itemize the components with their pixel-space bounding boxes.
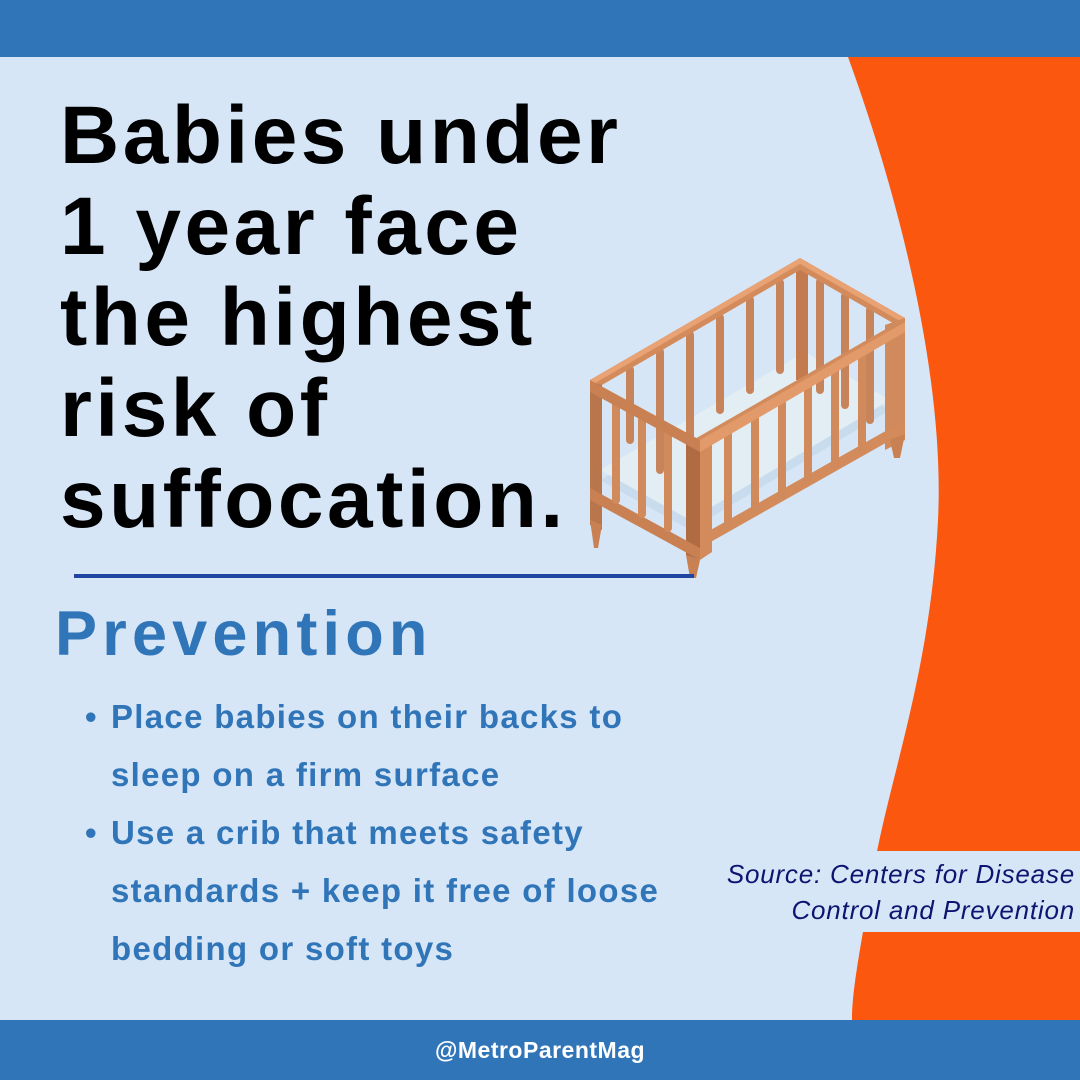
footer bar with handle [0, 1020, 1080, 1080]
title: risk of [60, 363, 331, 454]
bullet list: bedding or soft toys [111, 930, 454, 967]
bullet list: Place babies on their backs to [111, 698, 623, 735]
footer bar with handle: @MetroParentMag [435, 1037, 645, 1063]
bullet list [85, 698, 659, 967]
bullet list: sleep on a firm surface [111, 756, 500, 793]
bullet list: standards + keep it free of loose [111, 872, 659, 909]
title: the highest [60, 272, 536, 363]
heading: Prevention: Prevention [55, 599, 433, 669]
source box: Control and Prevention [791, 895, 1075, 925]
bullet list: Use a crib that meets safety [111, 814, 584, 851]
source box [700, 851, 1080, 932]
title: suffocation. [60, 454, 567, 545]
title [60, 90, 621, 545]
bullet list: • [85, 698, 98, 735]
top bar [0, 0, 1080, 57]
title: Babies under [60, 90, 621, 181]
title: 1 year face [60, 181, 523, 272]
source box: Source: Centers for Disease [727, 859, 1075, 889]
bullet list: • [85, 814, 98, 851]
divider line [74, 574, 694, 578]
